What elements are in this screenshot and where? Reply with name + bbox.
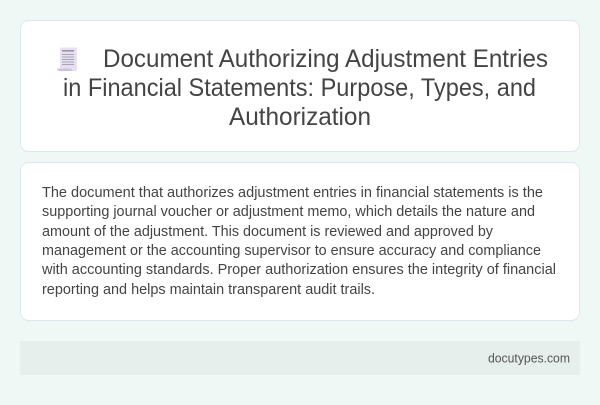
footer source text: docutypes.com <box>488 350 570 366</box>
text block: description: with accounting standards. Proper authorization ensures the integrity of financial <box>41 262 556 278</box>
title: Authorization <box>229 103 371 131</box>
icon: document receipt scroll <box>57 48 77 71</box>
title: Document Authorizing Adjustment Entries <box>103 45 548 73</box>
text block: description: reporting and helps maintain transparent audit trails. <box>42 282 375 298</box>
footer bar <box>20 341 580 375</box>
title: in Financial Statements: Purpose, Types, and <box>63 74 536 102</box>
text block: description: amount of the adjustment. This document is reviewed and approved by <box>42 224 494 240</box>
title <box>63 45 548 131</box>
panel: title card <box>20 20 580 152</box>
panel: description card <box>20 162 580 320</box>
text block: description: The document that authorizes adjustment entries in financial statements is the <box>42 185 543 201</box>
text block: description: management or the accounting supervisor to ensure accuracy and compliance <box>42 243 541 259</box>
text block: description <box>41 185 556 298</box>
text block: description: supporting journal voucher or adjustment memo, which details the nature and <box>42 204 535 220</box>
